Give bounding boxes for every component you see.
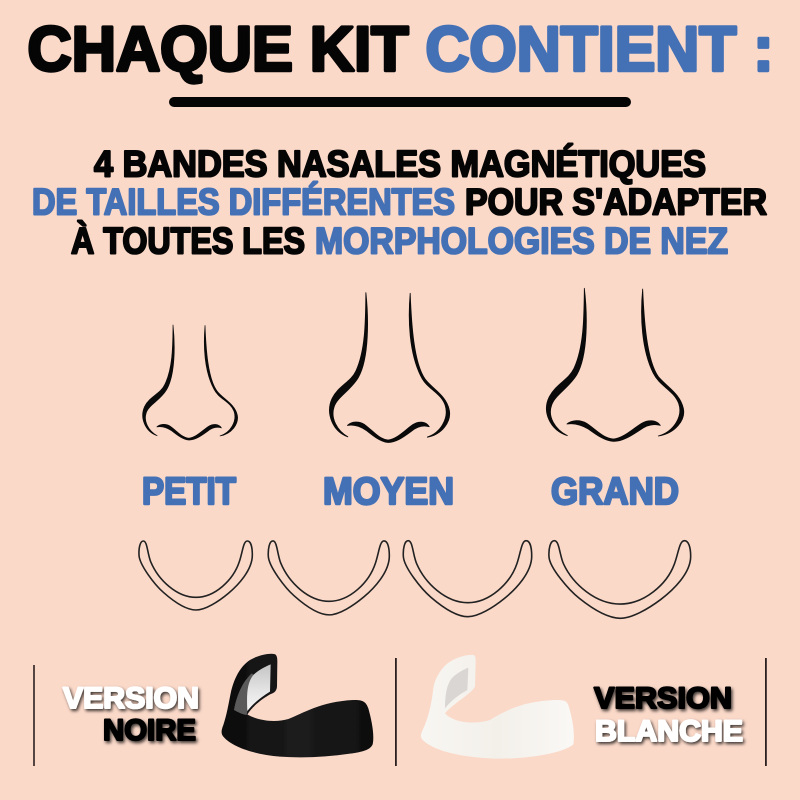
- description text: À TOUTES LES: [71, 220, 305, 262]
- strip outline 4: [549, 541, 691, 618]
- black version label: [63, 682, 199, 747]
- icon: large nose: [546, 288, 684, 441]
- white version label: BLANCHE: [595, 715, 743, 748]
- strip outline 2: [268, 541, 389, 615]
- description text: DE TAILLES DIFFÉRENTES: [32, 182, 455, 222]
- product: black nasal strip: [222, 654, 373, 757]
- product: white nasal strip: [421, 655, 574, 759]
- title: CHAQUE KIT: [28, 14, 408, 84]
- description text: POUR S'ADAPTER: [465, 182, 767, 222]
- strip outline 3: [403, 541, 532, 617]
- size labels: PETIT: [142, 471, 236, 513]
- icon: small nose: [143, 325, 238, 440]
- size labels: GRAND: [551, 471, 679, 513]
- description text: MORPHOLOGIES DE NEZ: [315, 220, 728, 262]
- white version label: VERSION: [594, 682, 732, 715]
- title: [28, 14, 774, 84]
- title underline: [169, 97, 631, 107]
- black version label: VERSION: [63, 682, 199, 715]
- size labels: MOYEN: [323, 471, 454, 513]
- size labels: [142, 471, 679, 513]
- white version label: [594, 682, 743, 748]
- description text: 4 BANDES NASALES MAGNÉTIQUES: [94, 144, 706, 184]
- description text: [32, 144, 767, 262]
- strip outline 1: [139, 541, 252, 610]
- black version label: NOIRE: [103, 714, 196, 747]
- icon: medium nose: [330, 293, 450, 442]
- title: CONTIENT :: [426, 14, 774, 84]
